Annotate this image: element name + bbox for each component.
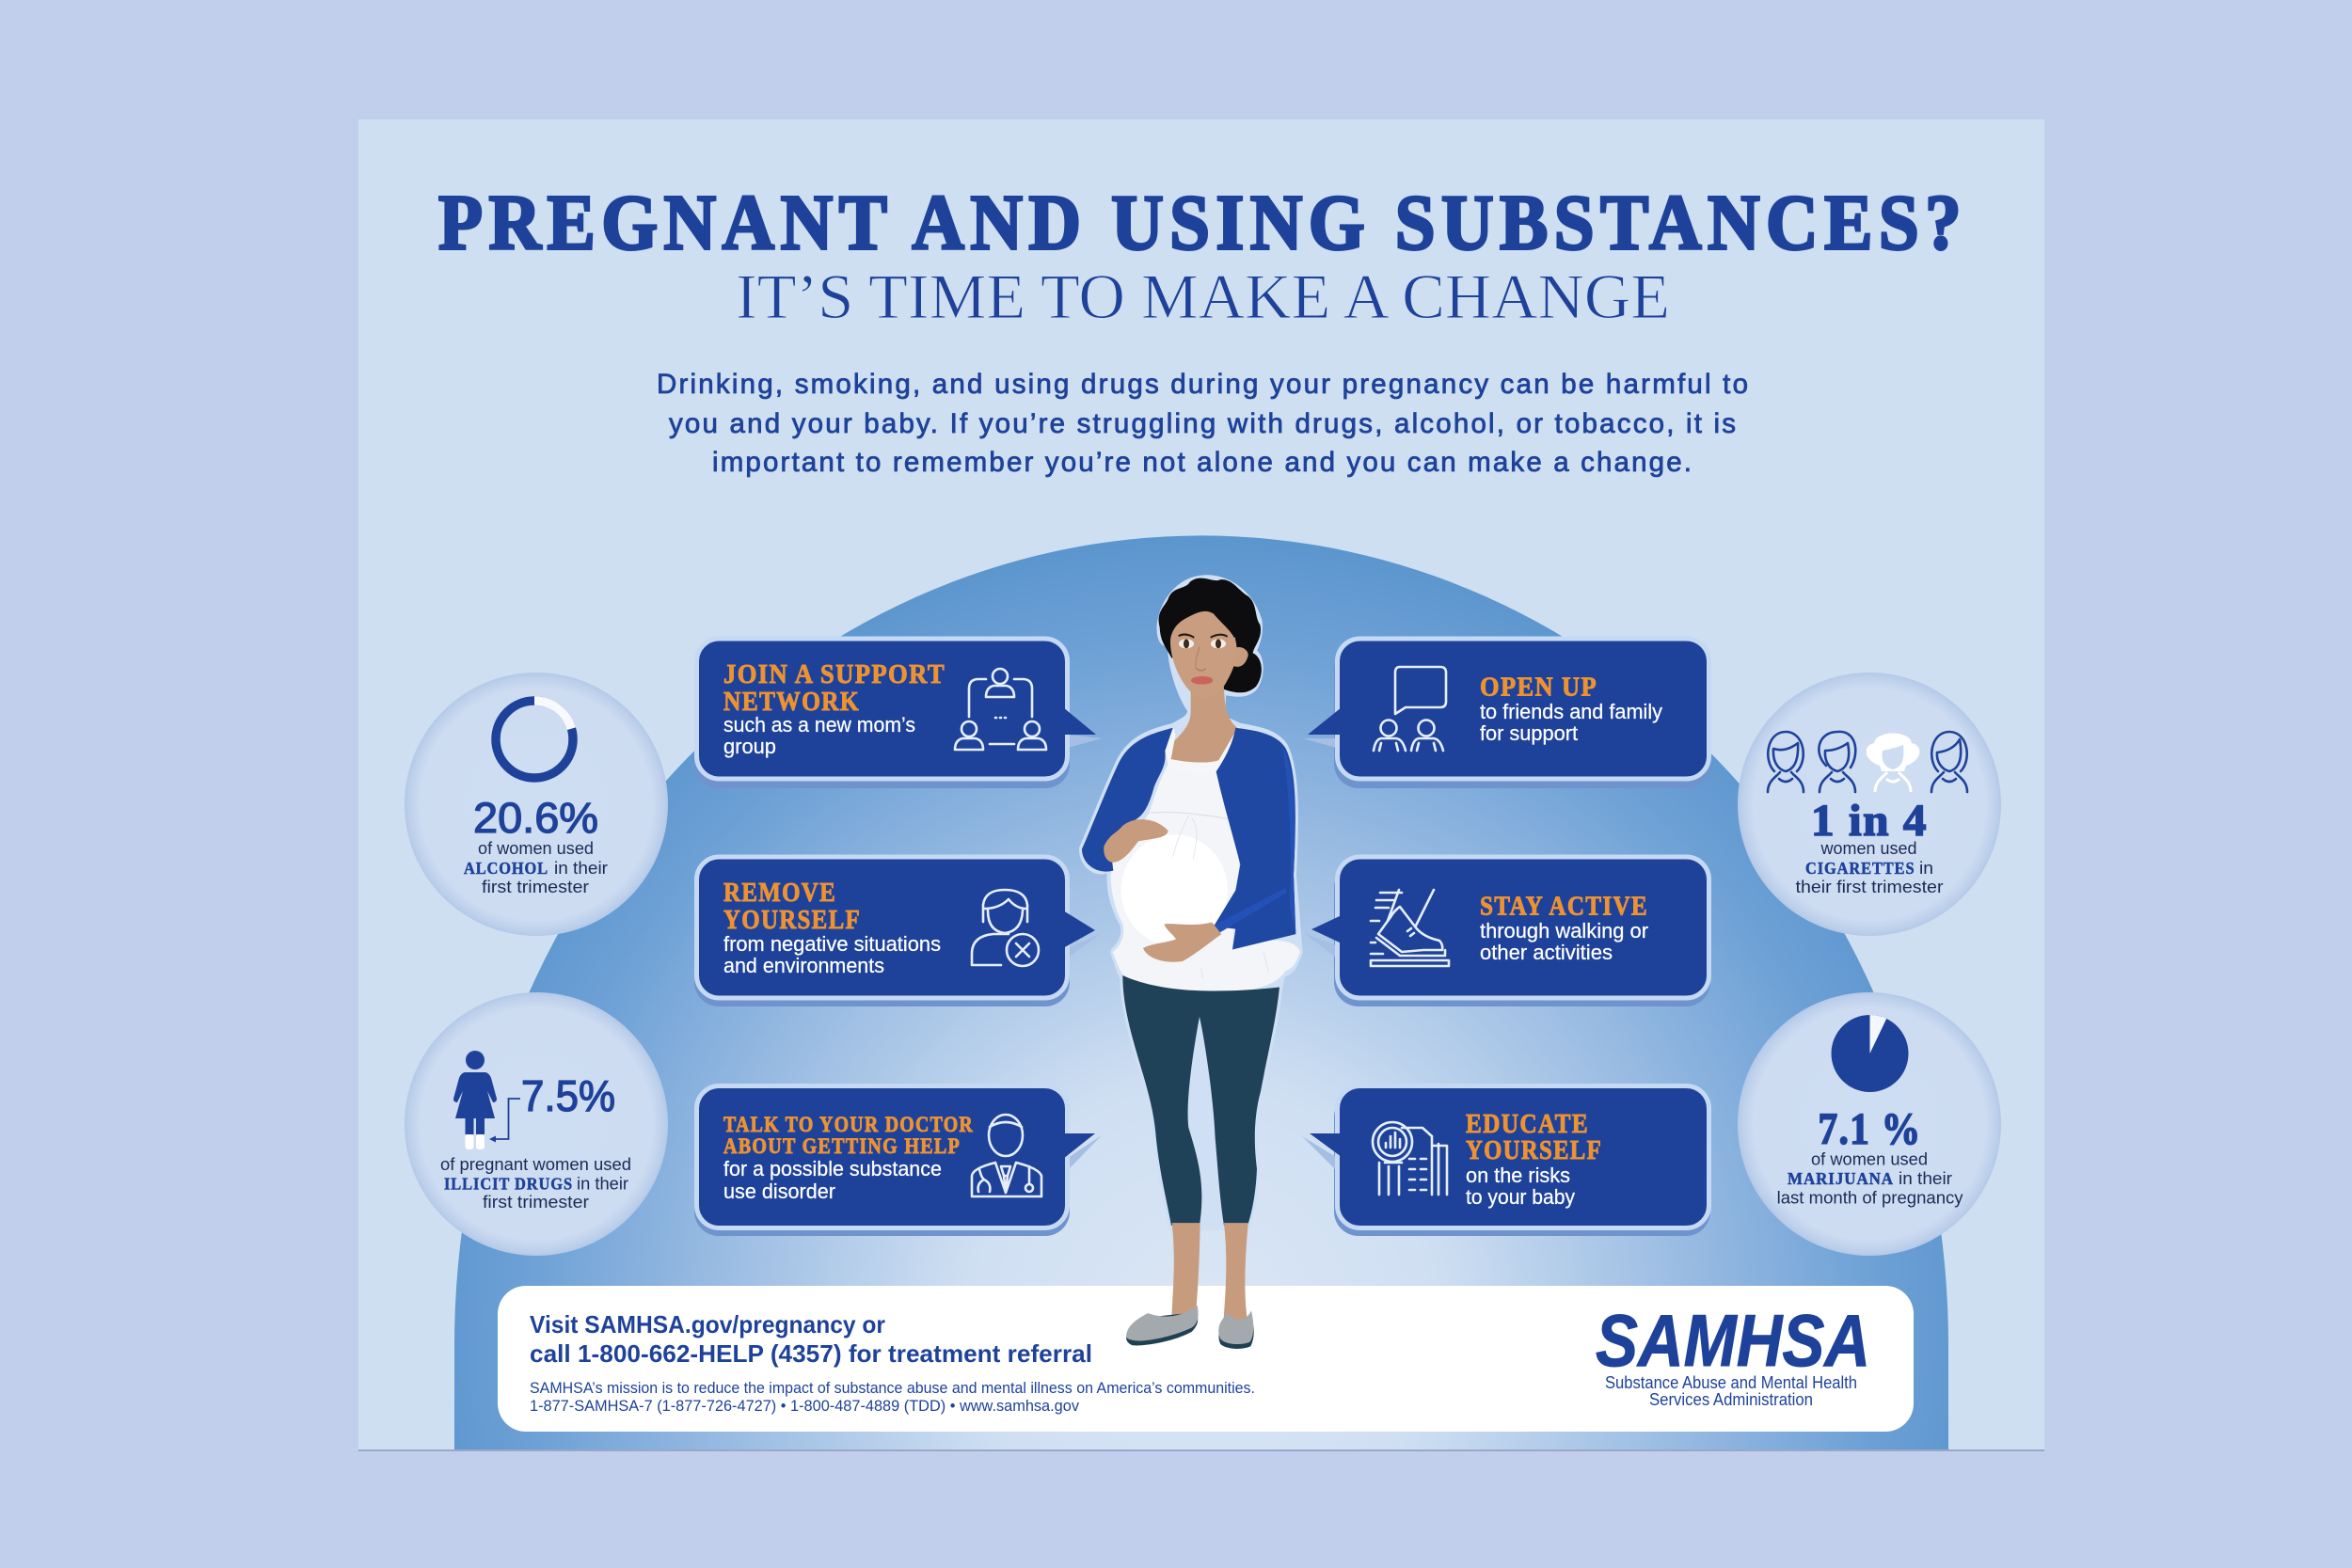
heading: OPEN UP xyxy=(1480,672,1597,702)
card: educate yourself xyxy=(1302,1085,1710,1236)
face xyxy=(1170,611,1237,698)
blouse folds xyxy=(1151,812,1268,978)
card: join a support network: group xyxy=(723,735,776,758)
title: PREGNANT AND USING SUBSTANCES? xyxy=(438,179,1967,267)
caption: in xyxy=(1919,859,1933,878)
mission text: 1-877-SAMHSA-7 (1-877-726-4727) • 1-800-487-4889 (TDD) • www.samhsa.gov xyxy=(530,1398,1080,1415)
referral text: Visit SAMHSA.gov/pregnancy or xyxy=(530,1310,885,1338)
bracket arrow xyxy=(489,1099,520,1142)
caption: of women used xyxy=(478,839,594,858)
donut chart 20.6% xyxy=(496,701,573,778)
caption: MARIJUANA xyxy=(1788,1169,1894,1188)
caption: in their xyxy=(554,859,608,878)
intro paragraph: Drinking, smoking, and using drugs during your pregnancy can be harmful to xyxy=(657,369,1748,400)
eyes and nose xyxy=(1179,635,1228,671)
icon: doctor xyxy=(972,1115,1041,1196)
heading: REMOVE xyxy=(723,878,836,908)
collar trim xyxy=(1165,726,1245,774)
jacket left xyxy=(1082,728,1173,872)
body text: for a possible substance xyxy=(723,1157,942,1180)
SAMHSA logo: Services Administration xyxy=(1649,1390,1813,1409)
SAMHSA logo: Substance Abuse and Mental Health xyxy=(1605,1373,1857,1392)
jacket highlight xyxy=(1214,747,1295,934)
stat circle: cigarettes xyxy=(1738,673,2001,936)
stat circle: marijuana xyxy=(1738,992,2001,1256)
footer panel xyxy=(498,1286,1914,1432)
leggings xyxy=(1122,975,1279,1226)
background arch xyxy=(454,535,1948,1449)
SAMHSA logo xyxy=(1596,1299,1870,1409)
sheet xyxy=(358,119,2044,1451)
illustration: pregnant woman xyxy=(1082,578,1300,1349)
icon: speech bubble and two people xyxy=(1374,667,1446,751)
body text: to friends and family xyxy=(1480,700,1662,723)
card: talk to your doctor: ABOUT GETTING HELP xyxy=(723,1134,961,1159)
caption xyxy=(440,1155,631,1212)
caption: last month of pregnancy xyxy=(1777,1189,1963,1208)
number: 20.6% xyxy=(473,794,598,842)
belly xyxy=(1121,834,1228,946)
card: educate yourself: YOURSELF xyxy=(1466,1135,1602,1165)
card: remove yourself: and environments xyxy=(723,954,884,977)
calves xyxy=(1171,1223,1248,1326)
icon: four women xyxy=(1768,732,1967,792)
subtitle: IT’S TIME TO MAKE A CHANGE xyxy=(736,261,1670,332)
referral text xyxy=(530,1310,1092,1368)
highlighted woman xyxy=(1867,734,1919,792)
mission text xyxy=(530,1380,1255,1415)
body text: such as a new mom’s xyxy=(723,713,915,736)
caption: in their xyxy=(1899,1169,1952,1188)
stat circle: alcohol xyxy=(405,673,668,936)
mission text: SAMHSA’s mission is to reduce the impact of substance abuse and mental illness on America’s communities. xyxy=(530,1380,1255,1397)
referral text: call 1-800-662-HELP (4357) for treatment referral xyxy=(530,1339,1092,1368)
caption xyxy=(1777,1150,1963,1208)
card: remove yourself xyxy=(694,857,1102,1006)
card: talk to your doctor: use disorder xyxy=(723,1180,835,1203)
caption: of pregnant women used xyxy=(440,1155,631,1174)
card: open up: for support xyxy=(1480,721,1578,745)
shoes xyxy=(1126,1306,1254,1349)
upper hand xyxy=(1104,819,1168,863)
card: join a support network xyxy=(694,639,1102,788)
ear xyxy=(1233,647,1248,667)
card: open up xyxy=(1303,639,1710,788)
icon: running shoe xyxy=(1371,890,1449,966)
intro paragraph: important to remember you’re not alone and you can make a change. xyxy=(712,447,1692,478)
icon: woman figure xyxy=(453,1051,497,1149)
icon: magnifier over report xyxy=(1373,1122,1447,1195)
heading: EDUCATE xyxy=(1466,1109,1589,1139)
caption: ALCOHOL xyxy=(464,859,548,878)
caption: ILLICIT DRUGS xyxy=(444,1174,573,1193)
blouse xyxy=(1111,761,1300,994)
number: 7.1 % xyxy=(1818,1104,1921,1154)
caption: women used xyxy=(1820,839,1917,858)
heading: JOIN A SUPPORT xyxy=(723,659,946,689)
caption: CIGARETTES xyxy=(1805,859,1915,878)
caption: their first trimester xyxy=(1795,878,1944,896)
icon: network of people xyxy=(955,669,1046,750)
halo outline xyxy=(1082,579,1300,1226)
body text: from negative situations xyxy=(723,932,941,956)
stat circle: illicit drugs xyxy=(405,992,668,1256)
lower hand xyxy=(1143,922,1221,962)
card: talk to your doctor xyxy=(694,1085,1102,1236)
card: stay active: other activities xyxy=(1480,941,1613,964)
neck and chest xyxy=(1169,681,1240,762)
pie chart 7.1% xyxy=(1831,1015,1908,1092)
body text: through walking or xyxy=(1480,919,1648,942)
jacket right xyxy=(1214,728,1295,950)
body text: on the risks xyxy=(1466,1164,1570,1187)
intro paragraph: you and your baby. If you’re struggling with drugs, alcohol, or tobacco, it is xyxy=(669,408,1736,439)
caption: in their xyxy=(577,1174,628,1193)
heading: STAY ACTIVE xyxy=(1480,892,1648,922)
number: 1 in 4 xyxy=(1811,796,1928,846)
caption: first trimester xyxy=(483,1193,589,1212)
card: join a support network: NETWORK xyxy=(723,687,860,717)
number: 7.5% xyxy=(521,1071,615,1120)
card: educate yourself: to your baby xyxy=(1466,1185,1575,1209)
heading: TALK TO YOUR DOCTOR xyxy=(723,1113,974,1137)
hair xyxy=(1159,578,1262,692)
caption: first trimester xyxy=(482,878,589,896)
card: remove yourself: YOURSELF xyxy=(723,905,861,935)
icon: person with x xyxy=(972,890,1039,966)
caption xyxy=(464,839,608,896)
intro paragraph xyxy=(657,369,1748,478)
SAMHSA logo: SAMHSA xyxy=(1596,1299,1870,1382)
card: stay active xyxy=(1304,857,1710,1006)
lips xyxy=(1191,676,1213,685)
caption xyxy=(1795,839,1944,896)
caption: of women used xyxy=(1811,1150,1928,1169)
